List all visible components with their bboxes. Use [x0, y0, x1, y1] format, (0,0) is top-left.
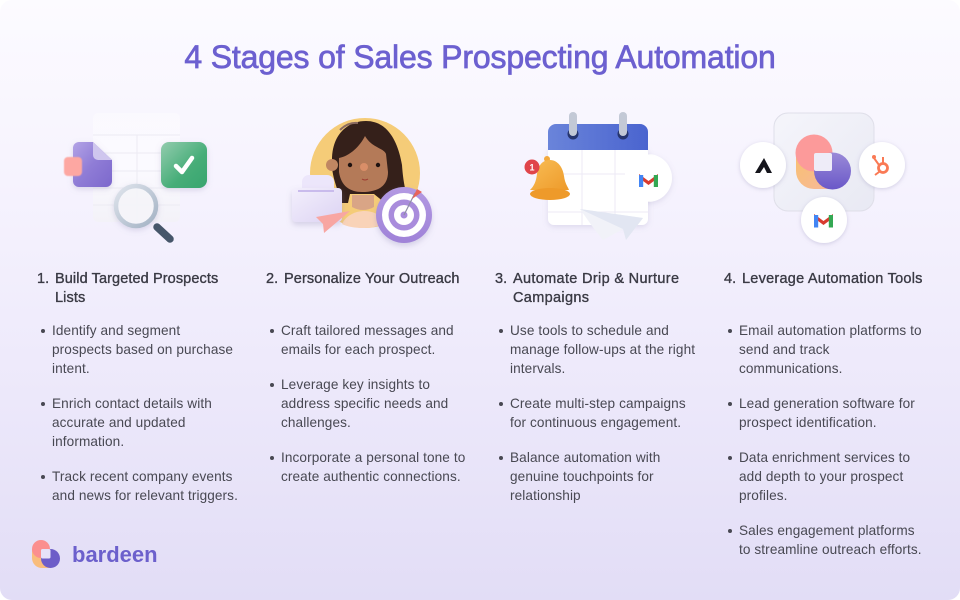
column 1 bullet list: prospects based on purchase — [52, 342, 233, 357]
column 3 bullet list: intervals. — [510, 361, 565, 376]
column 1 bullet list: intent. — [52, 361, 90, 376]
column 4 heading: 4. — [724, 271, 736, 287]
column 3 bullet list: manage follow-ups at the right — [510, 342, 695, 357]
footer logo: bardeen — [72, 542, 158, 567]
column 1 heading: Lists — [55, 290, 85, 306]
column 3 bullet list: for continuous engagement. — [510, 415, 681, 430]
icon: calendar with bell and gmail — [524, 112, 673, 240]
column 2 bullet list — [270, 323, 465, 484]
column 1 bullet list: Identify and segment — [52, 323, 180, 338]
column 1 bullet list: and news for relevant triggers. — [52, 488, 238, 503]
column 4 bullet list: to streamline outreach efforts. — [739, 542, 922, 557]
column 4 bullet list: Email automation platforms to — [739, 323, 922, 338]
column 3 heading: Automate Drip & Nurture — [513, 271, 679, 287]
footer logo — [32, 540, 158, 568]
column 3 heading: 3. — [495, 271, 507, 287]
column 2 heading: 2. — [266, 271, 278, 287]
column 2 bullet list: Incorporate a personal tone to — [281, 450, 465, 465]
column 1 bullet list — [41, 323, 238, 503]
column 4 heading: Leverage Automation Tools — [742, 271, 923, 287]
column 1 bullet list: accurate and updated — [52, 415, 186, 430]
icon: person with envelope and target — [290, 118, 434, 248]
column 2 bullet list: create authentic connections. — [281, 469, 461, 484]
column 2 bullet list: Craft tailored messages and — [281, 323, 454, 338]
icon: calendar with bell and gmail: 1 — [529, 162, 535, 172]
column 4 bullet list: Sales engagement platforms — [739, 523, 915, 538]
column 3 bullet list: genuine touchpoints for — [510, 469, 654, 484]
column 4 bullet list: Lead generation software for — [739, 396, 915, 411]
column 4 bullet list: profiles. — [739, 488, 788, 503]
column 1 bullet list: Enrich contact details with — [52, 396, 212, 411]
column 2 bullet list: Leverage key insights to — [281, 377, 430, 392]
column 2 bullet list: emails for each prospect. — [281, 342, 435, 357]
column 3 heading: Campaigns — [513, 290, 589, 306]
column 3 heading — [495, 271, 679, 306]
column 3 bullet list: Balance automation with — [510, 450, 660, 465]
icon: bardeen logo and integrations — [738, 112, 906, 246]
column 4 bullet list: Data enrichment services to — [739, 450, 910, 465]
column 1 bullet list: information. — [52, 434, 124, 449]
column 2 heading: Personalize Your Outreach — [284, 271, 460, 287]
column 3 bullet list: Create multi-step campaigns — [510, 396, 686, 411]
title: 4 Stages of Sales Prospecting Automation — [184, 39, 776, 75]
column 1 heading — [37, 271, 218, 306]
column 3 bullet list: relationship — [510, 488, 581, 503]
icon: spreadsheet with magnifier — [64, 134, 209, 243]
column 4 bullet list: prospect identification. — [739, 415, 877, 430]
column 1 heading: 1. — [37, 271, 49, 287]
column 2 bullet list: address specific needs and — [281, 396, 448, 411]
column 2 bullet list: challenges. — [281, 415, 351, 430]
column 3 bullet list — [499, 323, 695, 503]
column 4 bullet list: add depth to your prospect — [739, 469, 903, 484]
column 1 bullet list: Track recent company events — [52, 469, 233, 484]
column 4 bullet list — [728, 323, 922, 557]
column 4 bullet list: communications. — [739, 361, 842, 376]
column 3 bullet list: Use tools to schedule and — [510, 323, 669, 338]
column 1 heading: Build Targeted Prospects — [55, 271, 218, 287]
column 4 bullet list: send and track — [739, 342, 830, 357]
